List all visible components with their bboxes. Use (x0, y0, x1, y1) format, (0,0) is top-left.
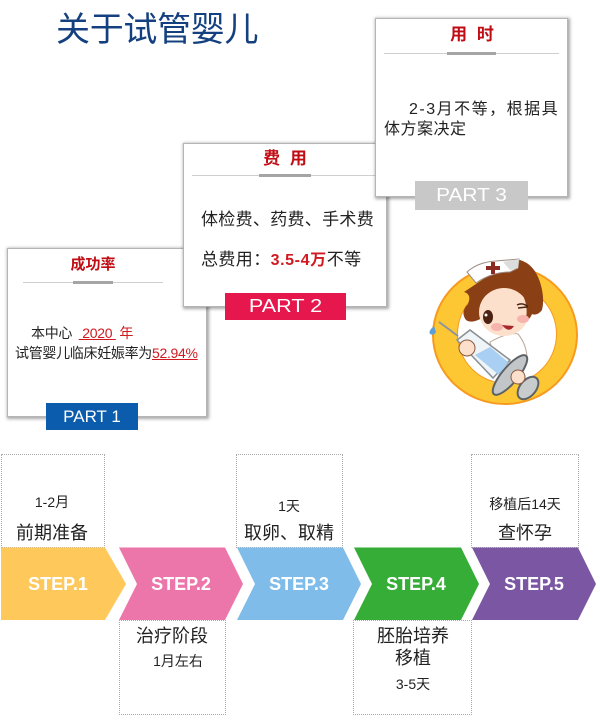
duration: step 2: 1月左右 (153, 653, 203, 669)
divider: success rate (23, 282, 163, 283)
icon: nurse with syringe (430, 258, 578, 405)
arrow: step 2: STEP.2 (151, 574, 211, 594)
arrow: step 3: STEP.3 (269, 574, 329, 594)
arrow: step 4: STEP.4 (386, 574, 446, 594)
step box 1 (1, 454, 105, 548)
divider accent (259, 174, 311, 177)
step box 3 (236, 454, 343, 548)
arrow: step 4 (354, 548, 479, 620)
arrow: step 2 (119, 548, 243, 620)
label: step 5: 查怀孕 (498, 523, 552, 543)
label: part 1 (46, 403, 138, 430)
arrow: step 5 (472, 548, 596, 620)
duration: step 5: 移植后14天 (489, 496, 561, 512)
panel: duration (375, 18, 568, 197)
title: 关于试管婴儿 (56, 11, 258, 49)
text: success rate: 本中心 2020 年 (31, 325, 133, 341)
label: step 2: 治疗阶段 (136, 626, 208, 646)
uniform (490, 334, 527, 368)
panel: success rate (7, 248, 207, 417)
label: part 3: PART 3 (436, 185, 507, 205)
syringe (430, 322, 542, 403)
label: step 3: 取卵、取精 (244, 523, 334, 543)
divider: duration (384, 53, 559, 54)
arrow: step 3 (237, 548, 361, 620)
heading: cost: 费 用 (263, 149, 307, 168)
step box 2 (119, 620, 226, 715)
nurse cap (467, 259, 519, 283)
divider: cost (192, 175, 382, 176)
text: cost items: 体检费、药费、手术费 (201, 210, 374, 229)
arrow: step 1: STEP.1 (28, 574, 88, 594)
step box 5 (471, 454, 579, 548)
text: duration (384, 100, 559, 138)
ring (432, 265, 578, 405)
text: duration: 2-3月不等，根据具 (409, 101, 559, 118)
label: part 3 (415, 181, 528, 210)
duration: step 1: 1-2月 (35, 494, 69, 510)
text: duration: 体方案决定 (384, 121, 467, 138)
text: success rate (15, 325, 198, 361)
heading: duration: 用 时 (450, 25, 494, 44)
arrow: step 5: STEP.5 (504, 574, 564, 594)
label: part 1: PART 1 (63, 407, 121, 426)
face (479, 288, 533, 336)
label: part 2: PART 2 (249, 296, 322, 316)
hair (463, 260, 543, 322)
label: step 4: 移植 (395, 648, 431, 668)
divider accent (447, 52, 496, 55)
text: total cost: 总费用：3.5-4万不等 (201, 250, 362, 269)
duration: step 3: 1天 (278, 498, 300, 514)
label: step 4 (377, 626, 449, 668)
label: step 1: 前期准备 (16, 523, 88, 543)
duration: step 4: 3-5天 (396, 676, 430, 692)
label: step 4: 胚胎培养 (377, 626, 449, 646)
heading: success rate: 成功率 (70, 256, 116, 273)
arrow: step 1 (1, 548, 126, 620)
panel: cost (183, 143, 387, 307)
text: success rate: 试管婴儿临床妊娠率为52.94% (15, 345, 198, 361)
label: part 2 (225, 293, 346, 320)
divider accent (73, 281, 113, 284)
step box 4 (353, 620, 472, 715)
step arrows (1, 548, 596, 620)
